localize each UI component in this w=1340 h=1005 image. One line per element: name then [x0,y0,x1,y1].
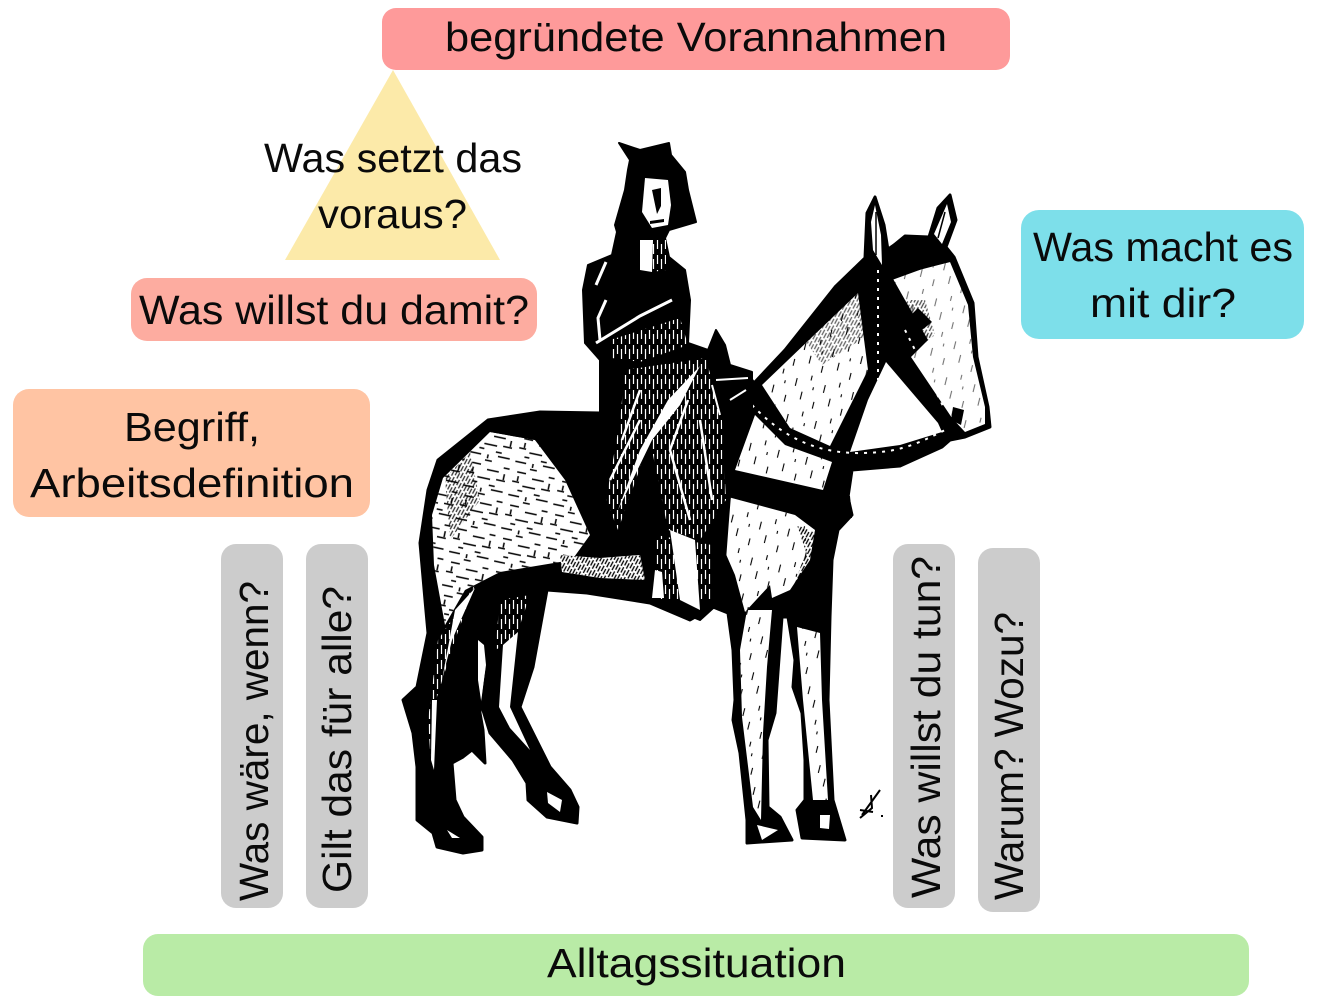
rump highlight [432,432,590,625]
skirt folds [606,358,726,540]
horse silhouette [403,195,990,853]
face [642,178,671,228]
face highlight [892,262,985,432]
box: Begriff, Arbeitsdefinition: Arbeitsdefinition [30,460,354,506]
box: Was willst du damit?: Was willst du damit? [139,287,529,333]
label: Gilt das für alle?: Gilt das für alle? [314,586,360,893]
belly shading [560,555,645,580]
ears [871,204,951,265]
box: begründete Vorannahmen [382,8,1010,70]
breast strap [718,472,852,518]
front chest [722,497,815,612]
box: Was willst du damit? [131,278,537,341]
signature [860,790,883,818]
triangle: Was setzt das voraus?: Was setzt das [264,135,522,181]
label: Warum? Wozu?: Warum? Wozu? [986,612,1032,900]
forelock [884,236,950,280]
box: Was macht es mit dir?: mit dir? [1090,280,1236,326]
white gap under the jaw [850,362,942,452]
hind leg highlights [499,632,530,750]
triangle: Was setzt das voraus? [264,70,522,260]
arm and neck lines [640,240,653,272]
label: Was wäre, wenn?: Was wäre, wenn? [231,581,277,901]
box: Begriff, Arbeitsdefinition: Begriff, [124,404,260,450]
label: Was wäre, wenn? [221,544,283,908]
box: Begriff, Arbeitsdefinition [13,389,370,517]
label: Was willst du tun? [893,544,955,908]
triangle: Was setzt das voraus?: voraus? [318,191,467,237]
saddle marks [712,378,748,415]
box: Alltagssituation [143,934,1249,996]
box: Was macht es mit dir? [1021,210,1304,339]
label: Warum? Wozu? [978,548,1040,912]
neck highlight [762,293,868,446]
label: Was willst du tun?: Was willst du tun? [903,556,949,898]
box: Alltagssituation: Alltagssituation [547,940,846,986]
rider [583,143,752,620]
chest patch above strap [735,415,832,490]
illustration: rider on horse [403,143,990,853]
box: Was macht es mit dir?: Was macht es [1033,224,1293,270]
front legs highlights [740,610,772,820]
box: begründete Vorannahmen: begründete Vorannahmen [445,14,947,60]
hoof highlights [447,792,830,840]
halter stripes [752,270,945,453]
label: Gilt das für alle? [306,544,368,908]
